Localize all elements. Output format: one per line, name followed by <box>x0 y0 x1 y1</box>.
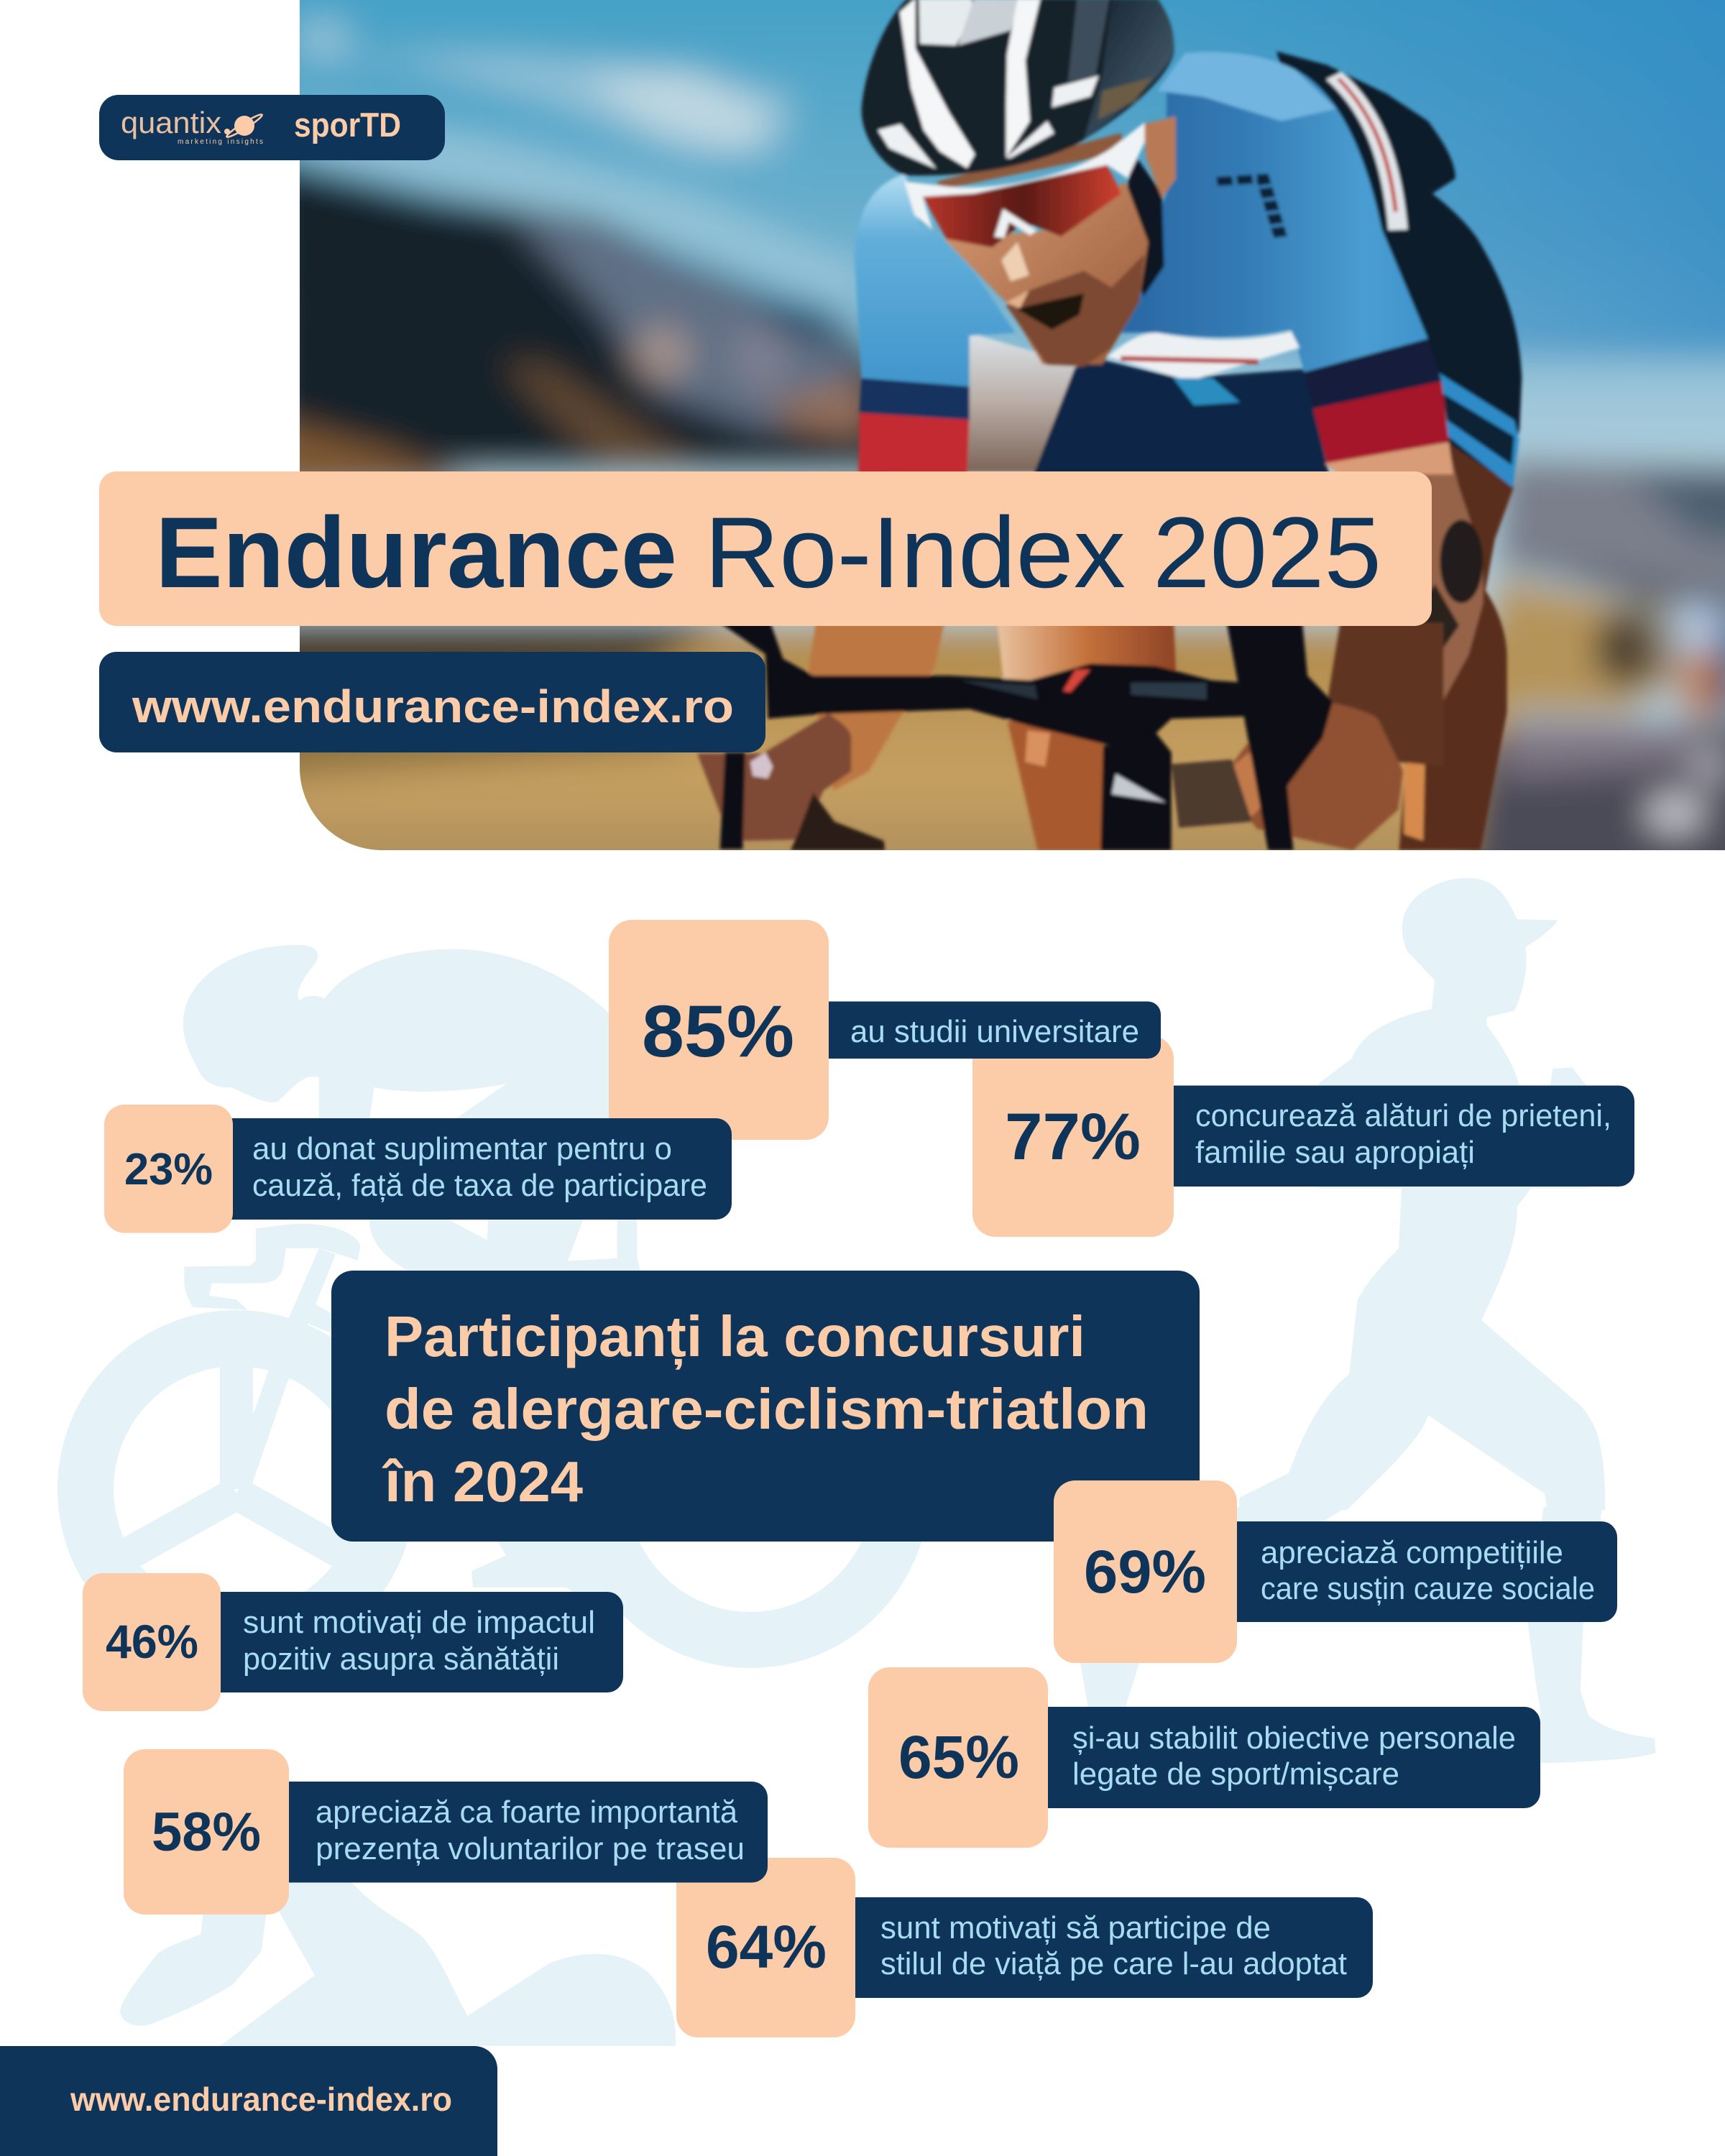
stat: 46%: sunt motivați de impactul <box>243 1605 595 1640</box>
stat: 23%: 23% <box>124 1145 213 1194</box>
stat: 58%: apreciază ca foarte importantă <box>316 1795 738 1830</box>
stat: 85%: au studii universitare <box>850 1014 1139 1049</box>
stat: 65% <box>868 1667 1540 1848</box>
stat: 85% <box>609 920 1161 1140</box>
title banner: 2025 <box>1153 496 1381 609</box>
title banner: Endurance <box>155 496 677 609</box>
logo tagline: marketing insights <box>178 138 263 146</box>
logo icon: planet <box>224 112 264 139</box>
stat: 64%: sunt motivați să participe de <box>880 1910 1271 1945</box>
stat: 64% <box>676 1858 1373 2037</box>
logo pill: quantix and sporTD <box>99 95 445 160</box>
main heading panel: de alergare-ciclism-triatlon <box>385 1377 1149 1441</box>
stat: 77%: familie sau apropiați <box>1195 1135 1475 1170</box>
stat: 77%: 77% <box>1005 1100 1141 1174</box>
website banner <box>99 652 765 752</box>
stat: 58%: 58% <box>152 1802 261 1863</box>
stat: 65%: 65% <box>898 1723 1019 1791</box>
stat: 46% <box>83 1573 623 1711</box>
stat: 69%: 69% <box>1084 1538 1206 1606</box>
footer website tab <box>0 2046 497 2156</box>
stat: 69%: care susțin cauze sociale <box>1261 1571 1595 1606</box>
cyclist: face, glasses and helmet <box>862 0 1176 367</box>
stat: 69% <box>1054 1480 1617 1663</box>
main heading panel: Participanți la concursuri <box>385 1304 1085 1370</box>
website banner: www.endurance-index.ro <box>132 681 734 732</box>
blurred landscape <box>300 0 1725 850</box>
background silhouette: cyclist <box>86 945 901 2046</box>
stat: 77% <box>972 1036 1634 1237</box>
main heading panel: în 2024 <box>382 1450 584 1514</box>
main heading panel <box>331 1271 1200 1542</box>
logo text: quantix: quantix <box>121 106 221 139</box>
stat: 69%: apreciază competițiile <box>1261 1535 1563 1570</box>
cyclist: back shorts and arm <box>1276 52 1522 850</box>
hero photo: cyclist on road bike <box>216 0 1725 905</box>
title banner <box>99 471 1432 626</box>
logo text: sporTD: sporTD <box>294 106 401 144</box>
stat: 64%: 64% <box>706 1913 827 1981</box>
background silhouette: runner <box>1080 878 1656 1763</box>
cyclist: handlebars, arms and legs <box>697 623 1443 850</box>
stat: 46%: pozitiv asupra sănătății <box>243 1641 559 1677</box>
stat: 46%: 46% <box>106 1615 198 1668</box>
title banner: Ro-Index <box>704 496 1126 609</box>
stat: 23%: cauză, față de taxa de participare <box>252 1168 707 1203</box>
stat: 85%: 85% <box>642 990 794 1072</box>
footer website tab: www.endurance-index.ro <box>70 2081 452 2118</box>
stat: 23% <box>104 1105 732 1233</box>
stat: 58%: prezența voluntarilor pe traseu <box>316 1831 745 1866</box>
stat: 65%: și-au stabilit obiective personale <box>1072 1720 1516 1756</box>
stat: 58% <box>124 1749 768 1915</box>
stat: 23%: au donat suplimentar pentru o <box>252 1131 672 1166</box>
cyclist figure <box>697 0 1522 850</box>
cyclist: torso and jersey <box>855 52 1453 474</box>
stat: 77%: concurează alături de prieteni, <box>1195 1098 1611 1133</box>
stat: 65%: legate de sport/mișcare <box>1072 1756 1399 1792</box>
stat: 64%: stilul de viață pe care l-au adoptat <box>880 1946 1347 1981</box>
